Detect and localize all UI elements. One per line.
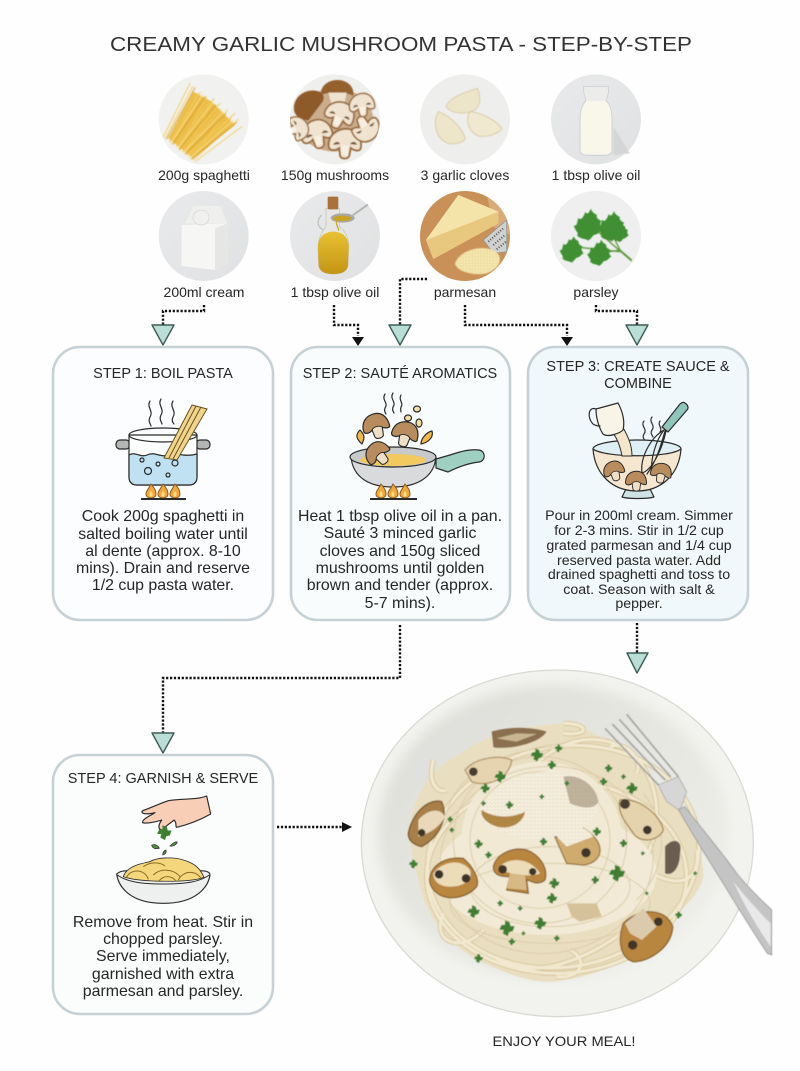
arrow: parmesan to step 3 [465, 305, 573, 346]
ingredient labels: 200ml cream [164, 284, 244, 300]
step 3 heading [546, 359, 730, 392]
ingredients grid [158, 74, 641, 300]
step 1 text: al dente (approx. 8-10 [85, 543, 241, 560]
mushrooms on pasta [408, 728, 681, 962]
cream sauce [437, 812, 657, 935]
ingredient labels: 1 tbsp olive oil [552, 167, 640, 183]
ingredient: parmesan [420, 191, 513, 281]
ingredient: mushrooms [290, 74, 380, 164]
step 2 heading: STEP 2: SAUTÉ AROMATICS [303, 365, 497, 382]
arrow: step 4 to finished dish [277, 822, 352, 832]
step 3 text: pepper. [615, 596, 663, 612]
step 2 text: cloves and 150g sliced [320, 543, 480, 560]
icon: frying pan with mushrooms [350, 393, 484, 499]
step 3 text: Pour in 200ml cream. Simmer [545, 508, 733, 524]
step 2 text: Sauté 3 minced garlic [324, 525, 476, 542]
ingredient labels: 3 garlic cloves [421, 167, 509, 183]
step 1 heading: STEP 1: BOIL PASTA [93, 366, 233, 382]
chopped parsley flecks [409, 744, 697, 963]
ingredient: garlic [420, 74, 510, 164]
step 4 heading: STEP 4: GARNISH & SERVE [68, 771, 259, 787]
panel: step 1 [53, 347, 273, 620]
ingredient labels: parsley [573, 284, 619, 300]
step 2 text: Heat 1 tbsp olive oil in a pan. [298, 508, 502, 525]
panel: step 4 [53, 755, 273, 1014]
panel: step 2 [291, 347, 510, 620]
step 2 text: mushrooms until golden [316, 560, 484, 577]
arrow: cream to step 1 [152, 305, 204, 345]
step 4 text [73, 914, 253, 1000]
step 1 text: mins). Drain and reserve [76, 560, 250, 577]
step 4 text: Remove from heat. Stir in [73, 914, 253, 931]
step 3 heading: STEP 3: CREATE SAUCE & [546, 359, 730, 375]
icon: hand sprinkling parsley over bowl [117, 796, 211, 903]
grated parmesan [480, 772, 598, 840]
arrow: step 2 to step 4 [152, 625, 400, 753]
ingredient labels: 150g mushrooms [281, 167, 389, 183]
step 4 text: Serve immediately, [96, 948, 230, 965]
ingredient labels [158, 167, 640, 300]
step 1 text [76, 508, 250, 594]
step 2 text [298, 508, 502, 612]
ingredient: olive oil bottle [290, 191, 380, 281]
step 3 text: for 2-3 mins. Stir in 1/2 cup [554, 523, 724, 539]
arrow: parsley to step 3 [596, 305, 648, 345]
ingredient: cream carton [159, 191, 249, 281]
photo: finished pasta plate [361, 670, 772, 1017]
step 3 text: grated parmesan and 1/4 cup [546, 538, 732, 554]
step 4 text: garnished with extra [92, 966, 234, 983]
step 4 text: chopped parsley. [103, 931, 223, 948]
ingredient: milk bottle [551, 74, 641, 164]
icon: mixing bowl with whisk and jug [589, 402, 688, 498]
title: CREAMY GARLIC MUSHROOM PASTA - STEP-BY-STEP [110, 33, 692, 56]
arrow: parmesan to step 2 [389, 279, 427, 345]
ingredient labels: parmesan [434, 284, 496, 300]
step 3 text: reserved pasta water. Add [557, 553, 721, 569]
arrow: olive oil to step 2 [334, 305, 364, 346]
step 3 text [545, 508, 733, 612]
pasta nest [410, 723, 703, 982]
panel: step 3 [528, 347, 748, 620]
ingredient: spaghetti [159, 74, 249, 164]
step 3 text: drained spaghetti and toss to [548, 567, 730, 583]
step 2 text: brown and tender (approx. [307, 577, 493, 594]
ingredient labels: 200g spaghetti [158, 167, 250, 183]
step 3 text: coat. Season with salt & [563, 582, 715, 598]
ingredient labels: 1 tbsp olive oil [291, 284, 379, 300]
step 3 heading: COMBINE [604, 376, 672, 392]
icon: pot with boiling pasta [116, 399, 210, 499]
ingredient: parsley [551, 191, 641, 281]
arrow: step 3 to finished dish [627, 623, 648, 673]
fork [605, 714, 772, 955]
step 1 text: Cook 200g spaghetti in [82, 508, 244, 525]
step 2 text: 5-7 mins). [365, 595, 435, 612]
closing text: ENJOY YOUR MEAL! [492, 1033, 636, 1049]
step 1 text: salted boiling water until [78, 526, 248, 543]
step 1 text: 1/2 cup pasta water. [92, 577, 234, 594]
step 4 text: parmesan and parsley. [83, 983, 243, 1000]
